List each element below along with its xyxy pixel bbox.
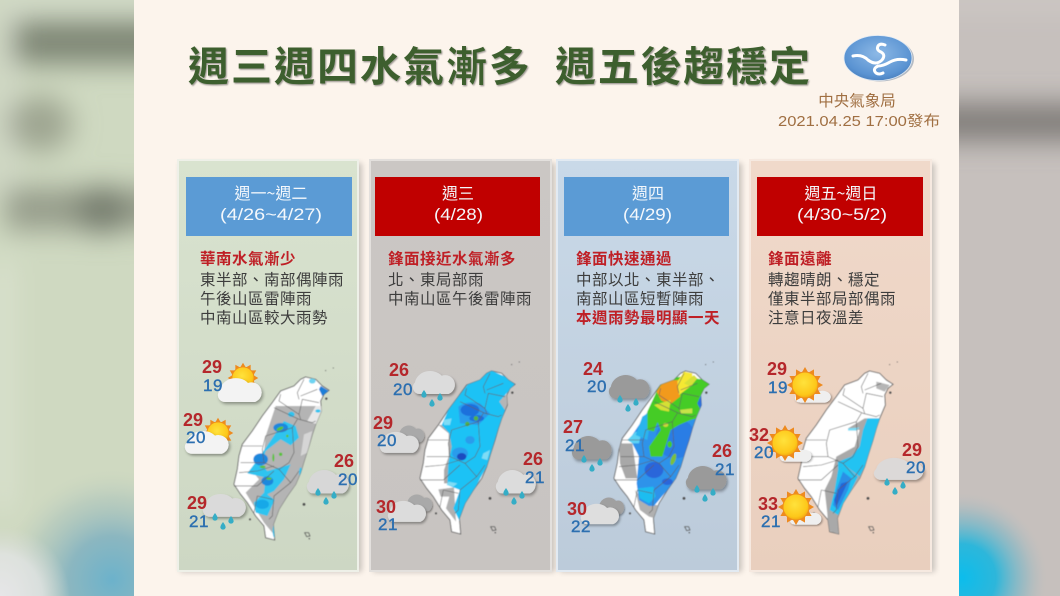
- weather: 29/19 sun and cloud: [202, 357, 262, 402]
- weather: 29/19 sun and cloud: 19: [203, 376, 223, 395]
- panel header: (4/28): [434, 205, 483, 224]
- weather: 29/21 rain: [187, 493, 246, 531]
- rainfall map of Taiwan: [614, 361, 714, 534]
- panel header: (4/26~4/27): [220, 205, 322, 224]
- rainfall map of Taiwan: [420, 361, 520, 534]
- title: [188, 33, 810, 93]
- forecast text: [200, 247, 344, 328]
- weather: 29/21 rain: 29: [187, 493, 207, 513]
- weather: 29/20 cloudy: [373, 413, 424, 453]
- background: center sheet: [134, 0, 959, 596]
- weather: 30/21 cloudy: [376, 494, 432, 534]
- panel header: (4/29): [623, 205, 672, 224]
- weather: 30/21 cloudy: 30: [376, 497, 396, 517]
- panel header: 週一~週二: [235, 180, 307, 204]
- panel header: [186, 177, 352, 236]
- weather: 24/20 rain: 20: [587, 377, 607, 396]
- forecast text: [768, 247, 896, 328]
- forecast text: 中部以北、東半部、: [576, 268, 720, 290]
- forecast text: 中南山區午後雷陣雨: [388, 287, 532, 309]
- issuer text: 中央氣象局: [818, 89, 896, 111]
- forecast text: 本週雨勢最明顯一天: [576, 306, 720, 328]
- weather: 30/22 cloudy: 22: [571, 517, 591, 536]
- panel: Wednesday: [369, 159, 555, 572]
- weather: 29/20 rain: [874, 440, 926, 495]
- weather: 27/21 rain: [563, 417, 612, 472]
- panel: Friday to Sunday: [749, 159, 935, 572]
- weather: 30/22 cloudy: [567, 497, 624, 536]
- forecast text: 東半部、南部偶陣雨: [200, 268, 344, 290]
- weather: 24/20 rain: [583, 359, 650, 412]
- forecast text: 鋒面遠離: [768, 247, 832, 269]
- weather: 29/20 rain: 20: [906, 458, 926, 477]
- title: 週五後趨穩定: [555, 33, 810, 93]
- weather: 29/19 sunny: 29: [767, 359, 787, 379]
- forecast text: 鋒面快速通過: [576, 247, 672, 269]
- weather: 33/21 sunny: [758, 489, 821, 531]
- weather: 26/21 rain: 21: [525, 468, 545, 487]
- weather: 26/21 rain: 26: [712, 441, 732, 461]
- forecast text: 南部山區短暫陣雨: [576, 287, 704, 309]
- weather: 26/21 rain: 21: [715, 460, 735, 479]
- weather: 24/20 rain: 24: [583, 359, 603, 379]
- forecast text: [576, 247, 720, 328]
- weather: 33/21 sunny: 33: [758, 494, 778, 514]
- rainfall map of Taiwan: [234, 367, 334, 543]
- weather: 29/20 rain: 29: [902, 440, 922, 460]
- weather: 32/20 sunny: [749, 425, 811, 462]
- weather: 29/19 sunny: [767, 359, 831, 403]
- issuer text: 2021.04.25 17:00發布: [778, 113, 940, 130]
- forecast text: 僅東半部局部偶雨: [768, 287, 896, 309]
- panel header: 週三: [442, 180, 474, 204]
- weather: 29/20 cloudy: 20: [377, 431, 397, 450]
- background: blurred right side: [959, 0, 1060, 596]
- rainfall map of Taiwan: [798, 361, 898, 535]
- panel header: 週四: [632, 180, 664, 204]
- weather: 29/21 rain: 21: [189, 512, 209, 531]
- weather: 32/20 sunny: 20: [754, 443, 774, 462]
- panel header: [375, 177, 540, 236]
- forecast text: [388, 247, 532, 309]
- panel: Monday to Tuesday: [177, 159, 362, 572]
- weather: 26/20 rain: 20: [393, 380, 413, 399]
- issuer text: [778, 89, 940, 130]
- panel header: [564, 177, 729, 236]
- weather: 27/21 rain: 27: [563, 417, 583, 437]
- panel: Thursday: [556, 159, 742, 572]
- forecast text: 鋒面接近水氣漸多: [388, 247, 516, 269]
- weather: 26/20 rain: 26: [334, 451, 354, 471]
- weather: 26/21 rain: [496, 449, 545, 505]
- weather: 30/22 cloudy: 30: [567, 499, 587, 519]
- forecast text: 午後山區雷陣雨: [200, 287, 312, 309]
- forecast text: 北、東局部雨: [388, 268, 484, 290]
- weather: 26/20 rain: [389, 360, 455, 407]
- panel header: [757, 177, 923, 236]
- weather: 32/20 sunny: 32: [749, 425, 769, 445]
- forecast text: 注意日夜溫差: [768, 306, 864, 328]
- panel header: (4/30~5/2): [797, 205, 887, 224]
- weather: 26/20 rain: [307, 451, 358, 505]
- forecast text: 華南水氣漸少: [200, 247, 296, 269]
- weather: 30/21 cloudy: 21: [378, 515, 398, 534]
- title: 週三週四水氣漸多: [188, 33, 530, 93]
- weather: 29/20 sun and cloud: [183, 410, 233, 454]
- weather: 27/21 rain: 21: [565, 436, 585, 455]
- panel header: 週五~週日: [805, 180, 877, 204]
- weather: 26/20 rain: 20: [338, 470, 358, 489]
- weather: 26/20 rain: 26: [389, 360, 409, 380]
- weather: 26/21 rain: [686, 441, 735, 502]
- weather: 26/21 rain: 26: [523, 449, 543, 469]
- forecast text: 轉趨晴朗、穩定: [768, 268, 880, 290]
- weather: 29/20 sun and cloud: 20: [186, 428, 206, 447]
- forecast text: 中南山區較大雨勢: [200, 306, 328, 328]
- icon: weather bureau logo: [844, 36, 914, 82]
- weather: 29/19 sunny: 19: [768, 378, 788, 397]
- background: blurred left side: [0, 0, 134, 596]
- weather: 29/20 sun and cloud: 29: [183, 410, 203, 430]
- weather: 33/21 sunny: 21: [761, 512, 781, 531]
- weather: 29/19 sun and cloud: 29: [202, 357, 222, 377]
- weather: 29/20 cloudy: 29: [373, 413, 393, 433]
